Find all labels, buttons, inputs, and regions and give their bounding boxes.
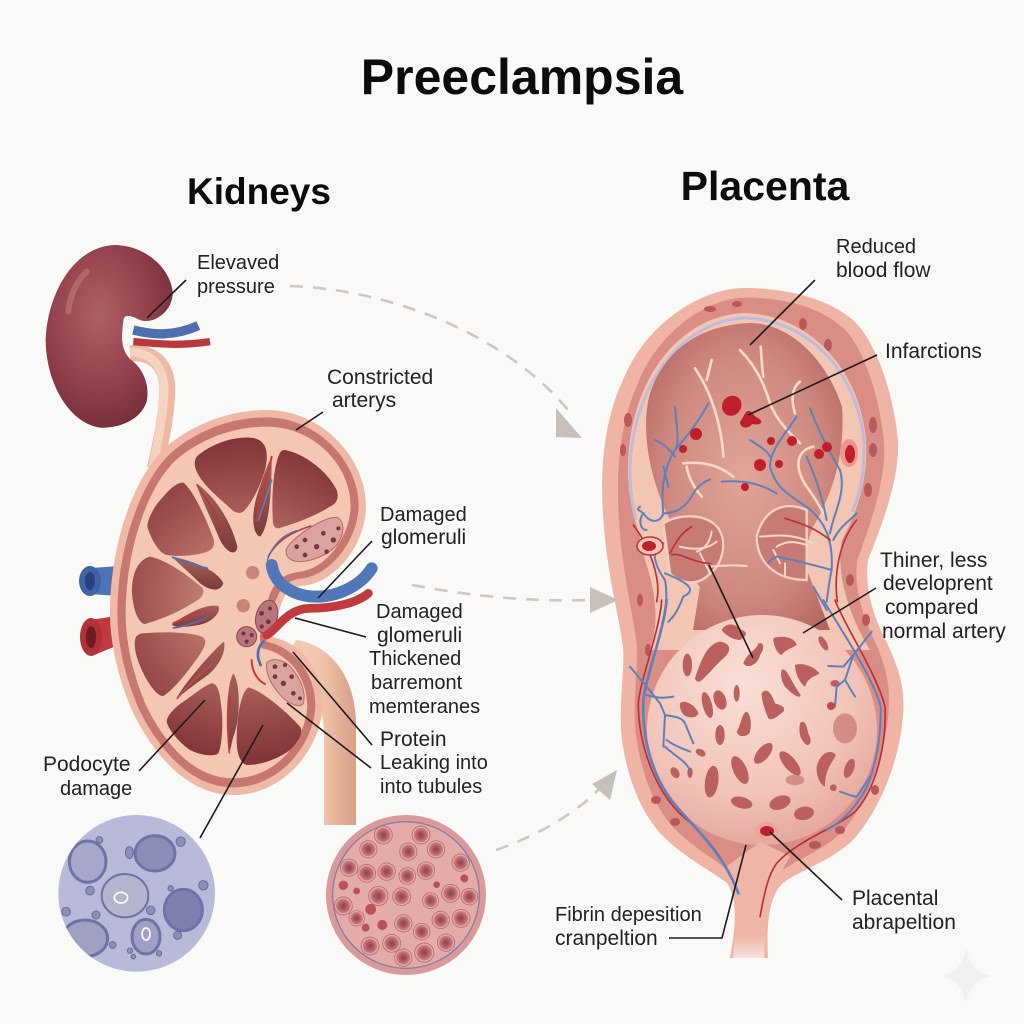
pointer to sphere <box>709 565 753 658</box>
chambers <box>663 506 807 582</box>
heading: kidneys: Kidneys <box>187 171 331 212</box>
label: placental abruption: abrapeltion <box>852 911 956 934</box>
label: damaged glomeruli 2: glomeruli <box>377 624 462 647</box>
label: elevated pressure: pressure <box>197 276 275 298</box>
label: damaged glomeruli 2: Damaged <box>376 601 463 623</box>
panel: kidney cross-section <box>110 410 372 795</box>
arrow: tubules to placenta <box>496 770 617 850</box>
lower wall vessels and branches <box>630 600 885 917</box>
label: podocyte damage <box>43 700 263 838</box>
label: protein leaking: Leaking into <box>380 752 488 774</box>
label: protein leaking: Protein <box>380 728 447 751</box>
label: elevated pressure: Elevaved <box>197 252 279 274</box>
label: damaged glomeruli 1: Damaged <box>380 504 467 526</box>
cavity <box>646 323 843 630</box>
cream branches <box>683 347 823 513</box>
tube: ureter from kidney section <box>280 640 356 825</box>
heading: placenta: Placenta <box>681 163 851 209</box>
vessels left of kidney section <box>79 566 118 656</box>
label: elevated pressure <box>147 252 279 318</box>
label: infarctions: Infarctions <box>885 340 982 363</box>
renal vein and artery <box>272 565 372 597</box>
label: infarctions <box>748 340 982 415</box>
cortical lobes with dots <box>286 517 343 561</box>
minor calyces <box>172 457 272 753</box>
label: thinner artery: developrent <box>883 572 993 595</box>
title: Preeclampsia <box>361 49 684 105</box>
label: thickened membranes: barremont <box>371 672 463 694</box>
arrow: pressure to placenta <box>290 286 582 438</box>
label: fibrin deposition: Fibrin depesition <box>555 904 702 926</box>
label: thinner artery: compared <box>885 596 978 619</box>
label: constricted artery: Constricted <box>327 366 433 389</box>
label: reduced blood flow: blood flow <box>836 259 931 282</box>
label: reduced blood flow <box>750 236 931 345</box>
sphere lesions <box>669 624 857 822</box>
uterine wall <box>602 288 903 958</box>
label: podocyte damage: damage <box>60 778 132 800</box>
infarcts <box>637 396 858 840</box>
vessels inside kidney <box>173 457 311 753</box>
inner lining <box>628 313 870 650</box>
micrograph: podocytes <box>58 815 215 972</box>
hilum nodules <box>237 566 281 647</box>
label: placental abruption: Placental <box>852 887 938 910</box>
label: thinner artery <box>803 549 1006 643</box>
micrograph: tubules <box>326 815 486 975</box>
label: fibrin deposition <box>555 845 746 950</box>
pyramids <box>132 437 338 765</box>
upper blue veins <box>633 403 857 622</box>
label: thickened membranes: Thickened <box>369 648 461 670</box>
label: placental abruption <box>770 832 956 934</box>
label: protein leaking: into tubules <box>380 776 482 798</box>
label: thinner artery: Thiner, less <box>880 549 987 572</box>
inner branches <box>680 532 813 577</box>
label: thickened membranes: memteranes <box>369 696 480 718</box>
lower sphere <box>647 615 877 845</box>
panel: placenta <box>602 288 903 958</box>
label: thinner artery: normal artery <box>882 620 1006 643</box>
label: fibrin deposition: cranpeltion <box>555 927 658 950</box>
label: protein leaking <box>287 652 488 798</box>
label: damaged glomeruli 1: glomeruli <box>381 526 466 549</box>
muscular layer <box>618 298 889 872</box>
icon: whole kidney with ureter <box>46 245 210 468</box>
label: constricted artery: arterys <box>332 389 396 412</box>
arrow: glomeruli to placenta <box>412 585 618 613</box>
label: constricted artery <box>296 366 433 430</box>
label: damaged glomeruli 2 <box>295 601 463 647</box>
label: damaged glomeruli 1 <box>318 504 467 598</box>
spots <box>620 301 879 849</box>
icon: sparkle watermark <box>942 948 990 1004</box>
label: reduced blood flow: Reduced <box>836 236 916 258</box>
neck <box>727 842 790 958</box>
label: podocyte damage: Podocyte <box>43 753 131 776</box>
